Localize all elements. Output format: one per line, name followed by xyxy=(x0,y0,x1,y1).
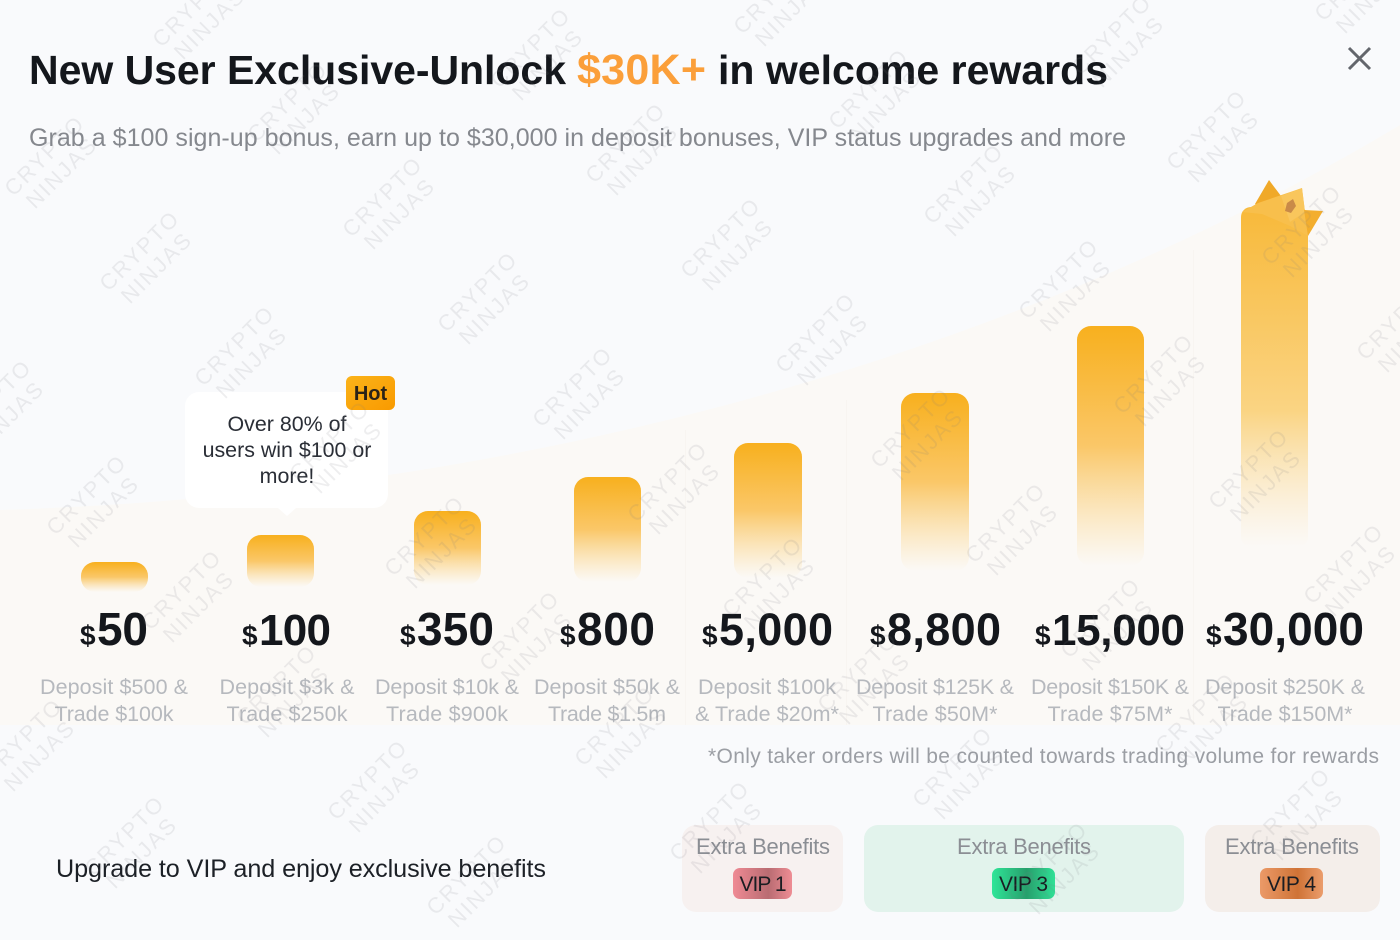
amount: $350: 350 xyxy=(417,603,494,655)
watermark pattern: CRYPTO xyxy=(622,436,713,527)
watermark pattern: NINJAS xyxy=(1225,445,1306,526)
watermark pattern: NINJAS xyxy=(834,648,915,729)
requirement: $30,000 xyxy=(1205,675,1365,726)
watermark pattern: CRYPTO xyxy=(421,829,512,920)
requirement: $15,000: Deposit $150K & xyxy=(1031,675,1189,699)
bar: $5,000 xyxy=(734,443,802,578)
requirement: $30,000: Deposit $250K & xyxy=(1205,675,1365,699)
amount: $50: 50 xyxy=(97,603,148,655)
watermark pattern: NINJAS xyxy=(253,661,334,742)
watermark pattern: NINJAS xyxy=(1267,784,1348,865)
callout: win rate tooltip: users win $100 or xyxy=(203,438,371,462)
panel: VIP 4 benefits xyxy=(1205,825,1380,912)
watermark pattern: NINJAS xyxy=(264,78,345,159)
watermark pattern: CRYPTO xyxy=(823,43,914,134)
watermark pattern: NINJAS xyxy=(697,214,778,295)
requirement: $50 xyxy=(40,675,188,726)
watermark pattern: NINJAS xyxy=(1172,689,1253,770)
watermark pattern: NINJAS xyxy=(845,65,926,146)
watermark pattern: NINJAS xyxy=(1077,594,1158,675)
bar: $15,000 xyxy=(1077,326,1144,566)
watermark pattern: NINJAS xyxy=(443,851,524,932)
reward amounts xyxy=(80,603,1364,655)
watermark pattern: NINJAS xyxy=(644,458,725,539)
watermark pattern: CRYPTO xyxy=(569,680,660,771)
requirement: $5,000 xyxy=(695,675,840,726)
bar chart: reward tiers xyxy=(81,207,1308,592)
panel: VIP 3 benefits: Extra Benefits xyxy=(957,834,1091,859)
requirement: $100: Deposit $3k & xyxy=(220,675,354,699)
amount: $800: $ xyxy=(560,620,576,651)
watermark pattern: NINJAS xyxy=(359,173,440,254)
title: $30K+ xyxy=(577,46,706,94)
watermark pattern: NINJAS xyxy=(211,322,292,403)
watermark pattern: CRYPTO xyxy=(907,721,998,812)
watermark pattern: NINJAS xyxy=(982,499,1063,580)
requirement: $15,000 xyxy=(1031,675,1189,726)
watermark pattern: NINJAS xyxy=(1320,540,1400,621)
watermark pattern: NINJAS xyxy=(344,756,425,837)
watermark pattern: CRYPTO xyxy=(812,626,903,717)
watermark pattern: CRYPTO xyxy=(41,449,132,540)
watermark pattern: CRYPTO xyxy=(284,395,375,486)
watermark pattern: NINJAS xyxy=(116,227,197,308)
requirement: $5,000: Deposit $100k xyxy=(698,675,836,699)
watermark pattern: NINJAS xyxy=(792,309,873,390)
watermark pattern: CRYPTO xyxy=(960,477,1051,568)
watermark pattern: CRYPTO xyxy=(189,300,280,391)
badge: VIP 3 xyxy=(992,868,1055,899)
watermark pattern: NINJAS xyxy=(739,553,820,634)
watermark pattern: NINJAS xyxy=(686,797,767,878)
watermark pattern: CRYPTO xyxy=(379,490,470,581)
requirement: $8,800: Trade $50M* xyxy=(872,702,998,726)
amount: $8,800: $ xyxy=(870,620,886,651)
watermark pattern: CRYPTO xyxy=(337,151,428,242)
requirement: $15,000: Trade $75M* xyxy=(1048,702,1173,726)
watermark pattern: CRYPTO xyxy=(1013,233,1104,324)
amount: $5,000: 5,000 xyxy=(719,604,833,655)
icon: close button xyxy=(1349,48,1370,69)
panel: VIP 3 benefits xyxy=(864,825,1184,912)
watermark pattern: CRYPTO xyxy=(1002,816,1093,907)
watermark pattern: NINJAS xyxy=(401,512,482,593)
bar: $50 xyxy=(81,562,148,592)
amount: $30,000: 30,000 xyxy=(1223,603,1364,655)
panel: VIP 1 benefits: Extra Benefits xyxy=(696,834,830,859)
amount: $800: 800 xyxy=(577,603,655,655)
watermark pattern: CRYPTO xyxy=(1256,179,1347,270)
watermark pattern: CRYPTO xyxy=(770,287,861,378)
watermark pattern: CRYPTO xyxy=(580,97,671,188)
badge: VIP 4 xyxy=(1260,868,1323,899)
watermark pattern: CRYPTO xyxy=(136,544,227,635)
hot badge: Hot xyxy=(354,383,387,405)
watermark pattern: NINJAS xyxy=(549,363,630,444)
bar: $100 xyxy=(247,535,314,587)
watermark pattern: NINJAS xyxy=(1035,255,1116,336)
badge: VIP 1: VIP 1 xyxy=(740,873,786,896)
watermark pattern: CRYPTO xyxy=(485,2,576,93)
watermark pattern: NINJAS xyxy=(0,715,80,796)
watermark pattern: CRYPTO xyxy=(1298,518,1389,609)
watermark pattern: NINJAS xyxy=(929,743,1010,824)
watermark pattern: CRYPTO xyxy=(242,56,333,147)
watermark pattern: NINJAS xyxy=(158,566,239,647)
watermark pattern: CRYPTO xyxy=(717,531,808,622)
requirement: $350: Deposit $10k & xyxy=(375,675,519,699)
bar: $350 xyxy=(414,511,481,585)
watermark pattern: NINJAS xyxy=(306,417,387,498)
badge: VIP 1 xyxy=(733,868,792,899)
amount: $5,000: $ xyxy=(702,620,718,651)
watermark pattern: CRYPTO xyxy=(0,110,90,201)
watermark pattern: NINJAS xyxy=(507,24,588,105)
callout: win rate tooltip: Over 80% of xyxy=(228,412,346,436)
requirement: $350: Trade $900k xyxy=(386,702,508,726)
subtitle: Grab a $100 sign-up bonus, earn up to $30,000 in deposit bonuses, VIP status upgrades and more xyxy=(29,124,1126,152)
watermark pattern: NINJAS xyxy=(21,132,102,213)
amount: $100: 100 xyxy=(259,606,331,655)
requirement: $800: Deposit $50k & xyxy=(534,675,680,699)
watermark pattern: NINJAS xyxy=(496,607,577,688)
VIP upgrade label: Upgrade to VIP and enjoy exclusive benefits xyxy=(56,855,546,883)
watermark pattern: NINJAS xyxy=(1183,106,1264,187)
watermark pattern: CRYPTO xyxy=(474,585,565,676)
watermark pattern: NINJAS xyxy=(887,404,968,485)
watermark pattern: CRYPTO xyxy=(1108,328,1199,419)
hot badge xyxy=(346,376,395,410)
watermark pattern: NINJAS xyxy=(591,702,672,783)
watermark pattern: CRYPTO xyxy=(1245,762,1336,853)
requirement: $30,000: Trade $150M* xyxy=(1218,702,1353,726)
watermark pattern: CRYPTO xyxy=(675,192,766,283)
title xyxy=(29,46,1108,94)
rising curve background area xyxy=(0,125,1400,725)
requirement: $350 xyxy=(375,675,519,726)
watermark pattern: CRYPTO xyxy=(79,790,170,881)
watermark pattern: CRYPTO xyxy=(1161,84,1252,175)
bar: $800 xyxy=(574,477,641,582)
requirement: $100 xyxy=(220,675,354,726)
watermark pattern: CRYPTO xyxy=(94,205,185,296)
amount: $100: $ xyxy=(242,620,258,651)
watermark pattern: NINJAS xyxy=(63,471,144,552)
amount: $50: $ xyxy=(80,620,96,651)
watermark pattern: NINJAS xyxy=(940,160,1021,241)
callout: win rate tooltip xyxy=(185,392,388,516)
watermark pattern: CRYPTO xyxy=(918,138,1009,229)
watermark pattern: NINJAS xyxy=(454,268,535,349)
watermark pattern: CRYPTO xyxy=(865,382,956,473)
amount: $15,000: $ xyxy=(1035,620,1051,651)
bar: $8,800 xyxy=(901,393,969,571)
callout: win rate tooltip: more! xyxy=(260,464,314,488)
icon: crown on top bar xyxy=(1242,180,1323,236)
requirement: $50: Trade $100k xyxy=(54,702,174,726)
watermark pattern: CRYPTO xyxy=(1055,572,1146,663)
badge: VIP 3: VIP 3 xyxy=(999,873,1048,896)
badge: VIP 4: VIP 4 xyxy=(1267,873,1316,896)
watermark pattern: CRYPTO xyxy=(664,775,755,866)
amount: $350: $ xyxy=(400,620,416,651)
requirement: $8,800 xyxy=(856,675,1014,726)
watermark pattern: CRYPTO xyxy=(1150,667,1241,758)
amount: $8,800: 8,800 xyxy=(887,604,1001,655)
panel: VIP 4 benefits: Extra Benefits xyxy=(1225,834,1359,859)
deposit and trade requirements xyxy=(40,675,1365,726)
watermark pattern: CRYPTO xyxy=(1203,423,1294,514)
watermark pattern: CRYPTO xyxy=(231,639,322,730)
requirement: $800 xyxy=(534,675,680,726)
title: in welcome rewards xyxy=(718,47,1108,93)
watermark pattern: CRYPTO xyxy=(322,734,413,825)
panel: VIP 1 benefits xyxy=(682,825,843,912)
requirement: $800: Trade $1.5m xyxy=(548,702,666,726)
watermark pattern: NINJAS xyxy=(1130,350,1211,431)
watermark pattern: CRYPTO xyxy=(527,341,618,432)
amount: $15,000: 15,000 xyxy=(1052,606,1185,655)
watermark pattern: CRYPTO xyxy=(432,246,523,337)
requirement: $8,800: Deposit $125K & xyxy=(856,675,1014,699)
requirement: $5,000: & Trade $20m* xyxy=(695,702,840,726)
watermark pattern: NINJAS xyxy=(101,812,182,893)
watermark pattern: NINJAS xyxy=(1024,838,1105,919)
footnote: *Only taker orders will be counted towards trading volume for rewards xyxy=(708,745,1379,768)
requirement: $50: Deposit $500 & xyxy=(40,675,188,699)
watermark pattern: NINJAS xyxy=(1278,201,1359,282)
watermark pattern: NINJAS xyxy=(1088,11,1169,92)
amount: $30,000: $ xyxy=(1206,620,1222,651)
requirement: $100: Trade $250k xyxy=(226,702,348,726)
title: New User Exclusive-Unlock xyxy=(29,47,566,93)
bar: $30,000 xyxy=(1241,207,1308,547)
watermark pattern: NINJAS xyxy=(602,119,683,200)
